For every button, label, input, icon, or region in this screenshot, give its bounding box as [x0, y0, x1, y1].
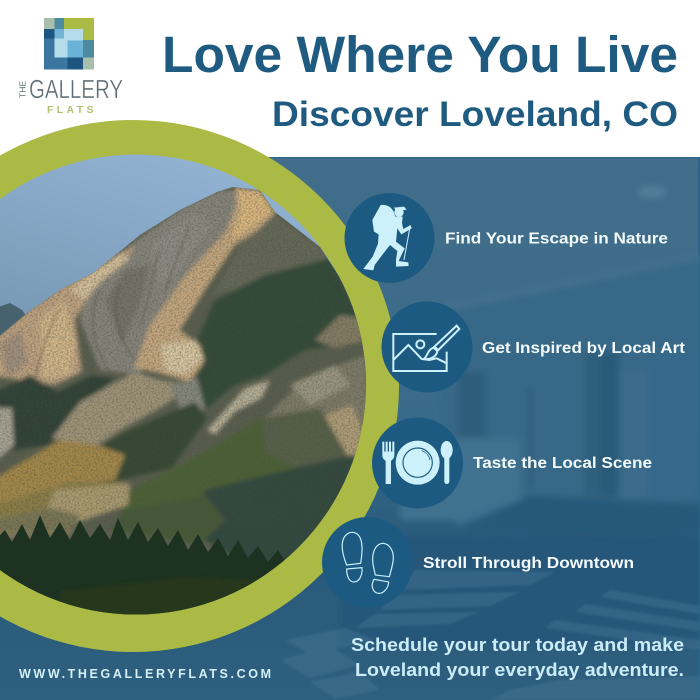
logo subword FLATS: FLATS — [47, 104, 94, 116]
central lit ridge — [134, 187, 276, 382]
mountain — [0, 180, 375, 620]
logo small word THE: THE — [18, 81, 28, 98]
rug stripes — [280, 570, 700, 700]
label: Get Inspired by Local Art — [482, 340, 685, 357]
logo — [18, 18, 123, 116]
title: Love Where You Live — [162, 26, 678, 83]
distant mountain — [0, 303, 26, 336]
upper right grey — [216, 214, 326, 296]
website: WWW.THEGALLERYFLATS.COM — [19, 667, 271, 681]
rock striations — [35, 225, 190, 378]
call to action: Loveland your everyday adventure. — [355, 659, 684, 680]
icon: painting and brush — [382, 302, 472, 392]
right rocks — [315, 315, 368, 348]
photo: mountain at golden hour — [0, 150, 380, 620]
logo wordmark: GALLERY — [29, 76, 123, 104]
green ring behind photo — [0, 120, 399, 652]
item: downtown — [322, 517, 634, 608]
sky — [0, 154, 366, 378]
lit left face — [0, 245, 135, 385]
grain texture — [0, 180, 375, 530]
golden slope — [0, 440, 125, 505]
call to action — [351, 634, 684, 680]
label: Find Your Escape in Nature — [445, 230, 668, 248]
icon: plate and cutlery — [372, 418, 463, 508]
icon: hiker — [344, 193, 434, 283]
central forest band — [102, 401, 208, 482]
grey rock face — [80, 190, 240, 375]
subtitle: Discover Loveland, CO — [272, 95, 678, 134]
left lower forest — [0, 375, 115, 452]
label: Stroll Through Downtown — [423, 555, 634, 572]
panel: blurred apartment interior background — [0, 156, 700, 700]
tree line foreground — [0, 515, 284, 614]
logo mark — [44, 18, 94, 70]
item: art — [382, 302, 685, 392]
lower left pale rock — [0, 408, 14, 462]
item: food — [372, 418, 652, 508]
icon: footprints — [322, 517, 413, 608]
right forest — [196, 257, 356, 409]
item: nature — [344, 193, 668, 283]
label: Taste the Local Scene — [473, 455, 652, 472]
call to action: Schedule your tour today and make — [351, 634, 684, 655]
